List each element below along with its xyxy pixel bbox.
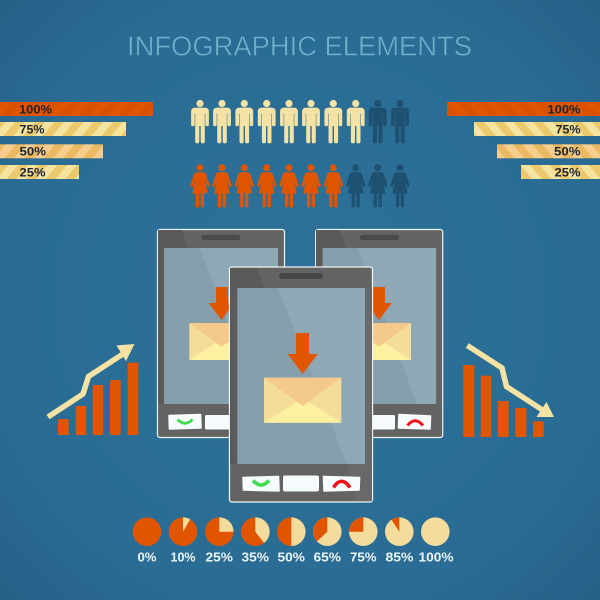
pie 65%: [313, 517, 342, 564]
pie 35%: 35%: [242, 550, 269, 564]
left bar 100%: [0, 102, 153, 116]
right bar 75%: 75%: [556, 123, 581, 137]
pie 10%: 10%: [170, 550, 196, 564]
icon: arrow down: [209, 287, 234, 320]
icon: green call button: [169, 414, 201, 429]
arrow: upward trend: [48, 344, 134, 417]
arrow: downward trend: [467, 346, 554, 417]
right bar 100%: [447, 102, 600, 116]
falling bar chart with arrow: [463, 346, 554, 437]
icon: red hang-up button: [324, 476, 360, 491]
left bar 50%: 50%: [20, 145, 46, 159]
pie 85%: [385, 517, 414, 564]
left bar 25%: 25%: [20, 166, 46, 180]
phone: back left: [158, 230, 284, 438]
pie 75%: [349, 517, 378, 564]
icon: envelope: [189, 323, 254, 360]
left bar 75%: [0, 122, 126, 137]
pictogram: women row, 7 of 10 highlighted: [190, 164, 410, 207]
right bar 25%: [521, 165, 600, 180]
pie 100%: [418, 517, 454, 564]
left bar 75%: 75%: [20, 123, 45, 137]
right percentage bars: [447, 102, 600, 180]
icon: envelope: [264, 378, 341, 423]
pie 35%: [241, 517, 270, 564]
right bar 25%: 25%: [554, 166, 581, 180]
right bar 50%: 50%: [554, 145, 581, 159]
rising bar chart with arrow: [48, 344, 138, 435]
pie 10%: [169, 517, 197, 564]
pie 50%: [277, 517, 306, 564]
phone: front: [230, 267, 372, 502]
pie 100%: 100%: [418, 550, 454, 564]
left bar 50%: [0, 144, 103, 159]
left bar 100%: 100%: [19, 102, 52, 116]
pie 0%: 0%: [138, 550, 156, 564]
middle button: [283, 476, 319, 492]
phone: back right: [316, 230, 443, 438]
pie 50%: 50%: [278, 550, 305, 564]
icon: arrow down: [288, 333, 318, 374]
pictogram: men row, 8 of 10 highlighted: [191, 100, 409, 143]
pie 85%: 85%: [386, 550, 414, 564]
pie charts row: [133, 517, 453, 564]
pie 65%: 65%: [314, 550, 341, 564]
pie 0%: [133, 517, 161, 564]
title: INFOGRAPHIC ELEMENTS: [127, 30, 472, 62]
icon: arrow down: [366, 287, 392, 320]
right bar 75%: [474, 122, 600, 137]
left percentage bars: [0, 102, 153, 180]
pie 25%: 25%: [206, 550, 233, 564]
screen: [237, 288, 365, 464]
pie 25%: [205, 517, 234, 564]
icon: red hang-up button: [398, 414, 430, 429]
right bar 50%: [497, 144, 600, 159]
pie 75%: 75%: [350, 550, 376, 564]
icon: green call button: [243, 476, 279, 491]
left bar 25%: [0, 165, 79, 180]
right bar 100%: 100%: [548, 102, 581, 116]
icon: envelope: [346, 323, 411, 360]
speaker grille: [279, 273, 323, 279]
